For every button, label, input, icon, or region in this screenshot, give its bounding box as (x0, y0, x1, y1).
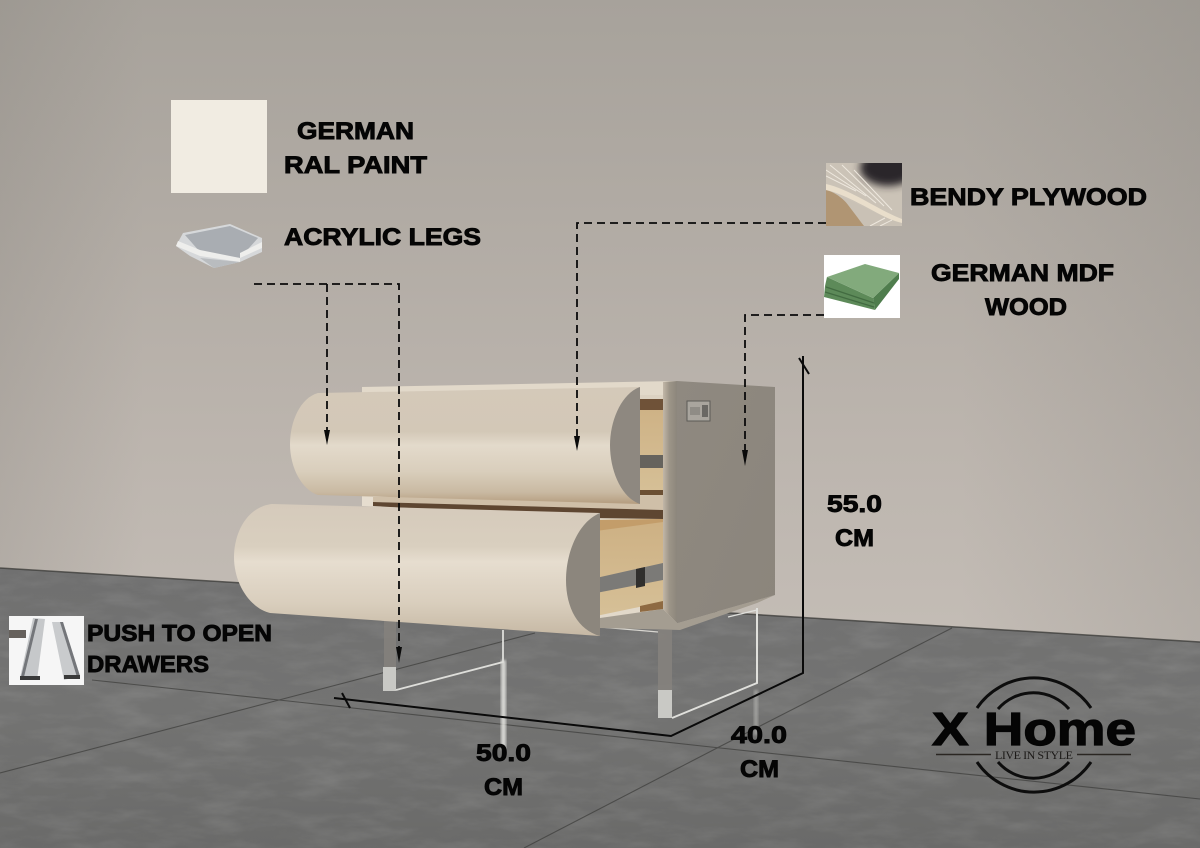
upper drawer interior (636, 395, 663, 495)
icon: german mdf boards (824, 255, 900, 318)
dimension: height 55.0 cm: CM (835, 525, 874, 552)
cabinet front strip (663, 381, 677, 623)
heading: german ral paint: GERMAN (297, 118, 414, 145)
upper cylinder drawer (290, 387, 640, 504)
dimension: width 50.0 cm: 50.0 (476, 740, 531, 767)
heading: push to open drawers: DRAWERS (87, 651, 209, 677)
label plate (687, 401, 710, 421)
lower drawer interior (596, 519, 663, 616)
lower cylinder drawer (234, 504, 600, 636)
heading: bendy plywood: BENDY PLYWOOD (910, 184, 1147, 211)
icon: acrylic sheets (176, 224, 262, 268)
heading: german ral paint: RAL PAINT (284, 152, 427, 179)
logo: x home: X Home (932, 703, 1136, 755)
lower drawer end cap (566, 513, 600, 636)
heading: push to open drawers: PUSH TO OPEN (87, 620, 272, 646)
icon: bendy plywood (826, 163, 902, 226)
dimension: width 50.0 cm: CM (484, 774, 523, 801)
swatch: german ral paint (171, 100, 267, 193)
dimension: height 55.0 cm: 55.0 (827, 491, 882, 518)
heading: german mdf wood: GERMAN MDF (931, 260, 1114, 287)
heading: push to open drawers (87, 620, 272, 677)
cabinet side panel (677, 381, 775, 623)
dimension: depth 40.0 cm: CM (740, 756, 779, 783)
dimension: depth 40.0 cm (731, 722, 787, 783)
icon: drawer slides (9, 616, 84, 685)
dashed line: bendy plywood (577, 223, 826, 438)
dashed line: acrylic legs branch (326, 284, 328, 432)
heading: german mdf wood (931, 260, 1114, 321)
heading: german ral paint (284, 118, 427, 179)
acrylic legs (383, 608, 757, 718)
heading: german mdf wood: WOOD (985, 294, 1067, 321)
logo: x home: LIVE IN STYLE (995, 748, 1073, 762)
dashed line: german mdf wood (745, 315, 824, 454)
logo: x home (932, 678, 1136, 792)
dimension: depth 40.0 cm: 40.0 (731, 722, 787, 749)
concrete floor (0, 568, 1200, 848)
middle gap (373, 495, 663, 510)
dimension: width 50.0 cm (476, 740, 531, 801)
dimension: height 55.0 cm (827, 491, 882, 552)
cabinet underside (600, 595, 775, 630)
callout arrowheads (324, 430, 748, 663)
dimension lines (334, 356, 809, 736)
cabinet back frame (362, 381, 677, 628)
nightstand with open drawers (234, 381, 775, 718)
floor reflections (501, 660, 758, 750)
heading: acrylic legs: ACRYLIC LEGS (284, 224, 481, 251)
upper drawer end cap (610, 387, 640, 504)
dashed line: acrylic legs (254, 284, 399, 650)
callout lines (254, 223, 826, 650)
wall background (0, 0, 1200, 648)
